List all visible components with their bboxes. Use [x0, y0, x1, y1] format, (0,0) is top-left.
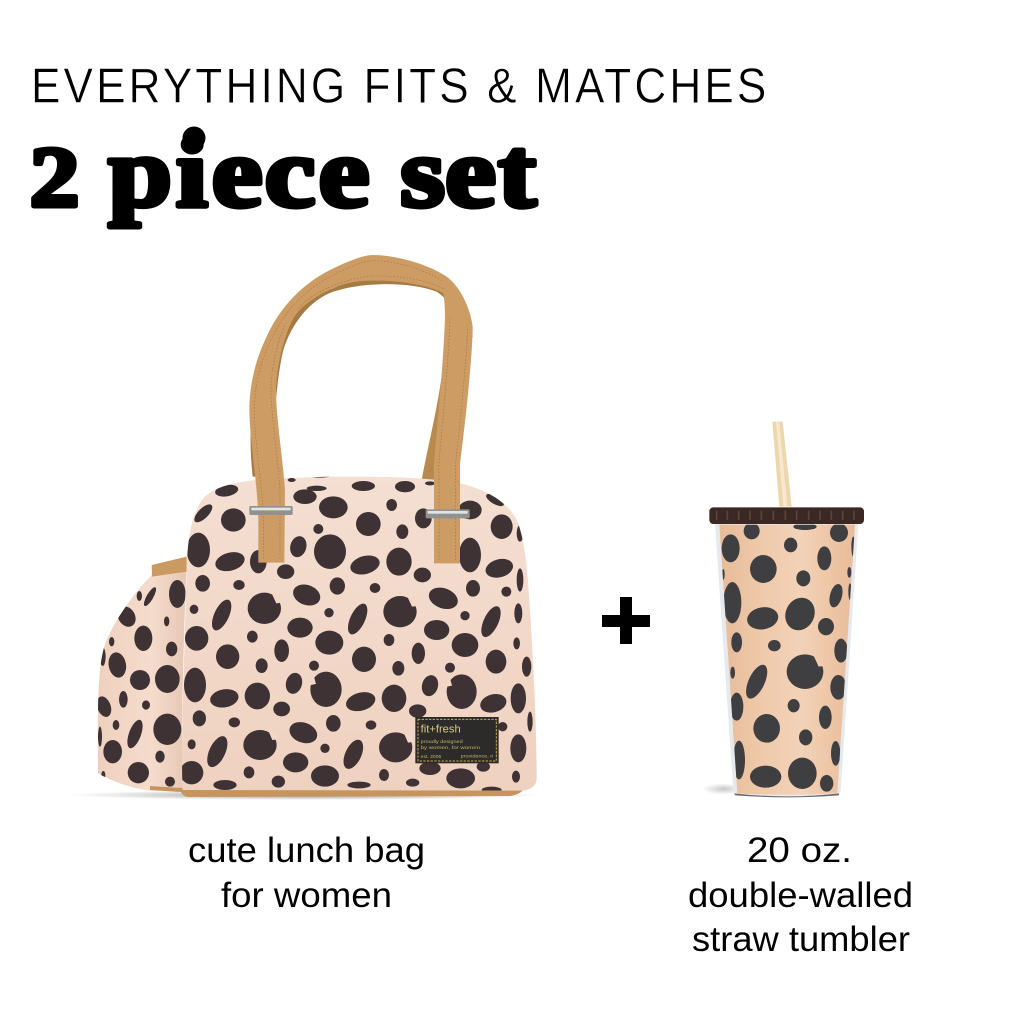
straw: [772, 422, 792, 507]
caption: tumbler: 20 oz.: [747, 831, 852, 870]
product: tumbler: [703, 422, 864, 797]
heading: everything fits and matches: EVERYTHING FITS & MATCHES: [31, 58, 766, 113]
caption: tumbler: double-walled: [688, 876, 913, 915]
plus sign: [602, 597, 650, 644]
title: 2 piece set: 2: [30, 130, 79, 225]
side pocket: [94, 557, 187, 791]
brand patch: [415, 717, 499, 763]
back handle: [251, 272, 473, 480]
bag ground shadow: [70, 790, 540, 800]
product: lunch bag: [70, 255, 540, 800]
caption: tumbler: [688, 831, 913, 959]
title: 2 piece set: piece: [108, 118, 370, 228]
lid: [709, 507, 864, 524]
caption: lunch bag: [188, 831, 425, 915]
cup base: [734, 793, 839, 797]
tumbler shadow: [703, 783, 744, 795]
brand patch: by women, for women: [421, 745, 480, 751]
front handle with buckles: [249, 255, 473, 563]
brand patch: providence, ri: [461, 753, 493, 758]
caption: lunch bag: cute lunch bag: [188, 831, 425, 870]
cup inner with spots: [719, 523, 855, 795]
bag base trim: [150, 786, 524, 797]
cup wall: [715, 524, 858, 797]
caption: lunch bag: for women: [221, 876, 392, 915]
brand patch: fit+fresh: [421, 724, 461, 736]
bag body with spot pattern: [180, 474, 537, 793]
title: 2 piece set: set: [400, 118, 536, 228]
brand patch: proudly designed: [421, 739, 463, 745]
title: 2 piece set: [30, 118, 536, 228]
brand patch: est. 2005: [421, 754, 442, 760]
caption: tumbler: straw tumbler: [692, 920, 910, 959]
